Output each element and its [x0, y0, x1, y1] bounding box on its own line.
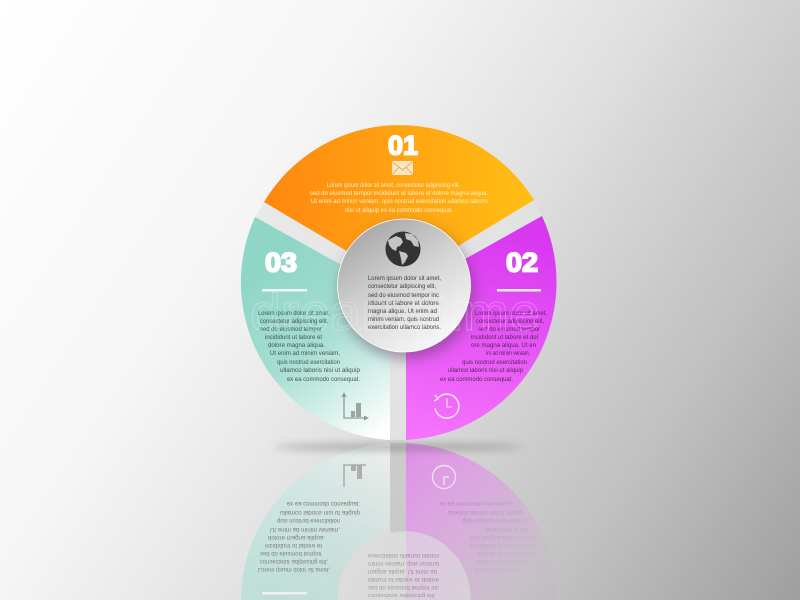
reflection: teal and circle: consectetur adipiscing elit,	[368, 592, 436, 598]
watermark: dreamstime	[250, 284, 540, 342]
icon: envelope	[392, 161, 413, 175]
text: panel 03	[258, 310, 360, 383]
reflection: gap band	[390, 443, 406, 533]
text: panel 03: incididunt ut labore et	[265, 334, 322, 341]
text: center: Lorem ipsum dolor sit amet,	[368, 275, 441, 282]
reflection: teal and circle: sed do eiusmod tempor inc	[368, 584, 440, 591]
ground shadow	[273, 444, 523, 450]
gap highlight	[255, 200, 542, 440]
reflection	[241, 443, 557, 600]
reflection: magenta: sed do eiusmod tempor	[478, 550, 541, 557]
bar: 02	[497, 289, 541, 292]
text: center: minim veniam, quis nostrud	[368, 316, 439, 323]
text: panel 01: nisi ut aliquip ex ea commodo consequat.	[345, 207, 453, 214]
reflection: teal and circle: incididunt ut labore et	[265, 542, 322, 549]
text: panel 03: ex ea commodo consequat.	[287, 376, 360, 383]
text: panel 02: consectetur adipiscing elit,	[476, 318, 544, 325]
reflection: magenta: Lorem ipsum dolor sit amet,	[475, 566, 547, 573]
reflection: teal and circle: ullamco laboris nisi ut aliquip	[280, 509, 360, 516]
text: panel 02: incididunt ut labore et dol	[471, 334, 538, 341]
text: panel 02: ullamco laboris nisi ut aliquip	[448, 367, 523, 374]
reflection: teal and circle: sed do eiusmod tempor	[260, 550, 323, 557]
reflection: teal and circle: exercitation ullamco laboris.	[368, 552, 441, 559]
text: panel 02: sed do eiusmod tempor	[478, 326, 541, 333]
text: panel 01	[310, 182, 489, 214]
text: panel 03: quis nostrud exercitation	[277, 359, 340, 366]
icon: clock	[434, 394, 459, 418]
text: panel 02: Lorem ipsum dolor sit amet,	[475, 310, 547, 317]
text: panel 02: ex ea commodo consequat.	[440, 376, 513, 383]
number 02: 02	[506, 248, 538, 278]
reflection: teal and circle: Lorem ipsum dolor sit amet,	[258, 566, 330, 573]
text: panel 01: Lorem ipsum dolor sit amet, consectetur adipiscing elit,	[327, 182, 460, 189]
reflection: teal and circle: ididunt ut labore et dolore	[368, 576, 439, 583]
text: panel 03: consectetur adipiscing elit,	[260, 318, 328, 325]
reflection: teal and circle	[241, 443, 470, 600]
reflection: teal and circle: quis nostrud exercitation	[277, 517, 340, 524]
panel: 01 orange segment	[264, 125, 534, 282]
reflection: magenta: ore magna aliqua. Ut en	[471, 534, 536, 541]
icon: globe	[386, 232, 420, 266]
text: center: magna aliqua. Ut enim ad	[368, 308, 437, 315]
text: center: consectetur adipiscing elit,	[368, 283, 436, 290]
bar: 03	[262, 289, 307, 292]
reflection: magenta: quis nostrud exercitation	[462, 517, 527, 524]
text: panel 03: dolore magna aliqua.	[268, 342, 325, 349]
text: panel 03: sed do eiusmod tempor	[260, 326, 323, 333]
text: panel 03: Ut enim ad minim veniam,	[270, 350, 340, 357]
text: center: exercitation ullamco laboris.	[368, 324, 441, 331]
reflection: magenta	[406, 443, 557, 600]
text: center: ididunt ut labore et dolore	[368, 300, 439, 307]
panel: 03 teal segment	[241, 217, 390, 440]
number 01: 01	[388, 130, 418, 160]
reflection: magenta: ex ea commodo consequat.	[440, 500, 513, 507]
reflection: magenta: ullamco laboris nisi ut aliquip	[448, 509, 523, 516]
icon: bar chart	[342, 392, 369, 420]
reflection: teal and circle: minim veniam, quis nostrud	[368, 560, 439, 567]
text: panel 03: Lorem ipsum dolor sit amet,	[258, 310, 330, 317]
text: center	[368, 275, 441, 331]
panel: center circle	[338, 219, 470, 352]
reflection: teal and circle: ex ea commodo consequat.	[287, 500, 360, 507]
reflection: magenta: incididunt ut labore et dol	[471, 542, 538, 549]
text: panel 02: quis nostrud exercitation	[462, 359, 527, 366]
reflection: teal and circle: consectetur adipiscing elit,	[260, 558, 328, 565]
reflection: teal and circle: Ut enim ad minim veniam,	[270, 526, 340, 533]
text: panel 03: ullamco laboris nisi ut aliquip	[280, 367, 360, 374]
text: center: sed do eiusmod tempor inc	[368, 292, 440, 299]
reflection: teal and circle: magna aliqua. Ut enim ad	[368, 568, 437, 575]
panel: 02 magenta segment	[406, 216, 557, 440]
reflection: teal and circle: dolore magna aliqua.	[268, 534, 325, 541]
number 03: 03	[265, 248, 297, 278]
text: panel 02: im ad minim veniam,	[486, 350, 530, 357]
text: panel 01: sed do eiusmod tempor incididunt ut labore et dolore magna aliqua.	[310, 190, 488, 197]
reflection: magenta: im ad minim veniam,	[486, 526, 530, 533]
text: panel 02	[440, 310, 547, 383]
reflection: magenta: consectetur adipiscing elit,	[476, 558, 544, 565]
text: panel 02: ore magna aliqua. Ut en	[471, 342, 536, 349]
center circle shadow	[340, 225, 474, 359]
text: panel 01: Ut enim ad minim veniam, quis nostrud exercitation ullamco laboris	[311, 198, 489, 205]
